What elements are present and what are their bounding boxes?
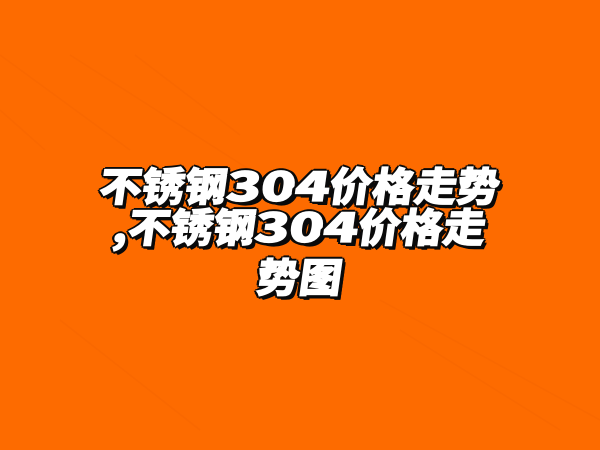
title line 1: 0	[257, 156, 300, 214]
title line 3: 势图	[254, 247, 347, 304]
title line 2: 4	[320, 197, 363, 254]
title line 2: 3	[252, 197, 295, 254]
title line 2: ,不锈钢 价格走	[110, 197, 490, 254]
title line 1: 不锈钢 价格走势	[96, 156, 504, 214]
title line 2: 0	[286, 197, 329, 254]
title line 1: 3	[223, 156, 266, 214]
title line 1: 4	[292, 156, 335, 214]
